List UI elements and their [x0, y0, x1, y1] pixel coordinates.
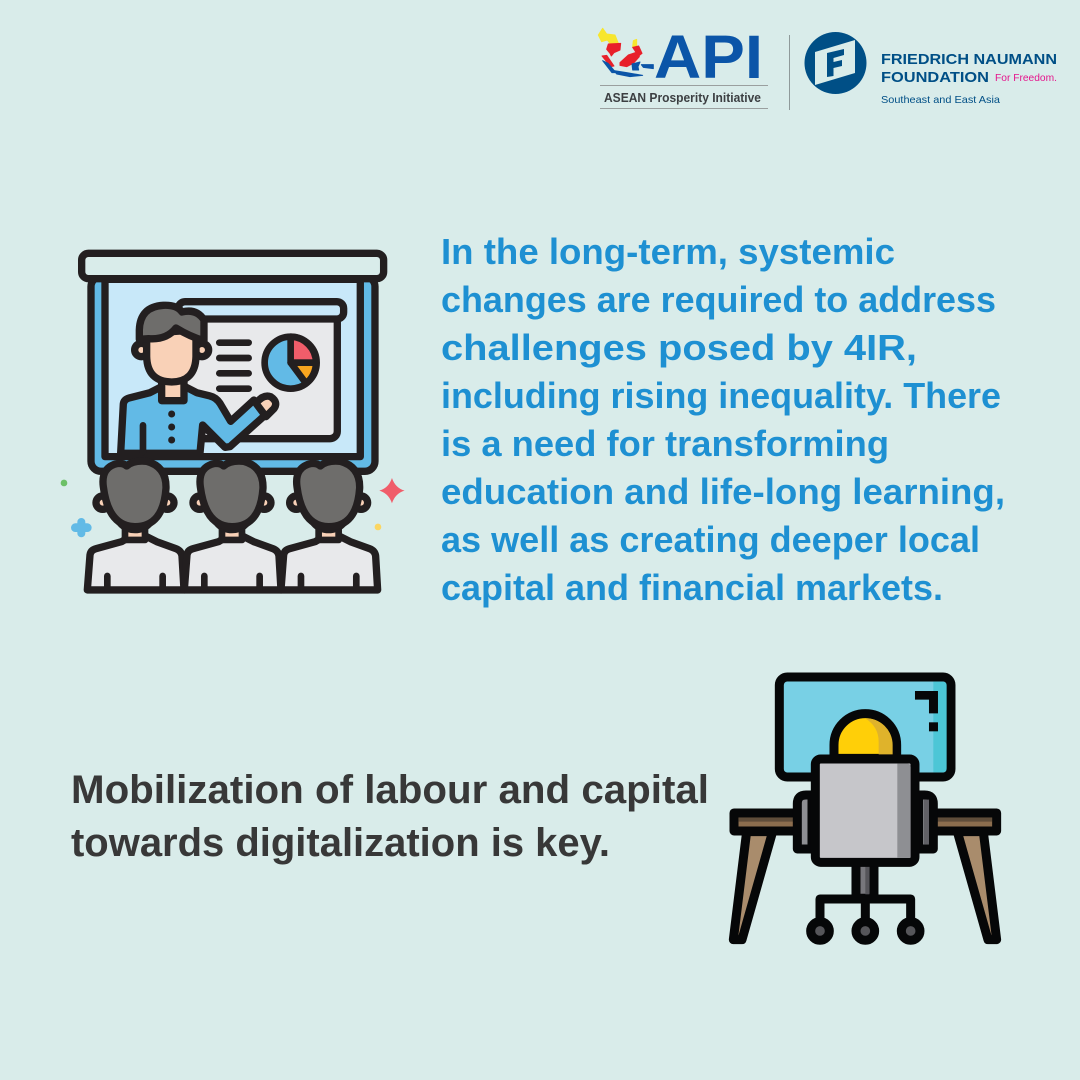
text block: long-term systemic changes: capital and financial markets.	[441, 567, 943, 608]
text block: long-term systemic changes: In the long-term, systemic	[441, 231, 895, 272]
pie chart	[265, 337, 317, 389]
audience member left	[87, 461, 184, 590]
logo: Friedrich Naumann Foundation	[804, 32, 1057, 106]
logo subtitle: ASEAN Prosperity Initiative	[604, 91, 761, 105]
chair	[797, 759, 933, 940]
text block: long-term systemic changes: education and life-long learning,	[441, 471, 1005, 512]
board text lines	[219, 343, 249, 389]
logo: Friedrich Naumann Foundation: Southeast and East Asia	[881, 94, 1000, 106]
logo text: FRIEDRICH NAUMANN	[881, 51, 1057, 68]
logo: Friedrich Naumann Foundation: FOUNDATION	[881, 69, 989, 86]
monitor	[779, 677, 951, 777]
desk	[733, 813, 997, 940]
person head	[834, 714, 897, 758]
logo wordmark API: API	[654, 23, 763, 91]
icon: presentation and audience	[61, 253, 405, 590]
logo: Friedrich Naumann Foundation: For Freedom.	[995, 72, 1057, 84]
presenter	[121, 305, 276, 453]
text block: long-term systemic changes	[441, 231, 1005, 608]
text block: long-term systemic changes: changes are required to address	[441, 279, 996, 320]
audience member right	[281, 461, 378, 590]
audience member centre	[184, 461, 281, 590]
icon: FNF circle emblem	[804, 32, 866, 94]
text block: long-term systemic changes: as well as creating deeper local	[441, 519, 980, 560]
text block: long-term systemic changes: challenges posed by 4IR,	[441, 327, 917, 368]
text block: long-term systemic changes: is a need for transforming	[441, 423, 889, 464]
text block: mobilization	[71, 768, 709, 865]
text block: long-term systemic changes: including rising inequality. There	[441, 375, 1001, 416]
presentation board	[178, 302, 344, 439]
text block: mobilization: towards digitalization is key.	[71, 821, 610, 865]
icon: ASEAN map	[598, 28, 653, 77]
logo: ASEAN Prosperity Initiative	[598, 23, 768, 109]
decorative sparkles	[61, 478, 405, 537]
text block: mobilization: Mobilization of labour and capital	[71, 768, 709, 812]
icon: desk, monitor and chair	[733, 677, 997, 940]
screen	[82, 253, 384, 471]
